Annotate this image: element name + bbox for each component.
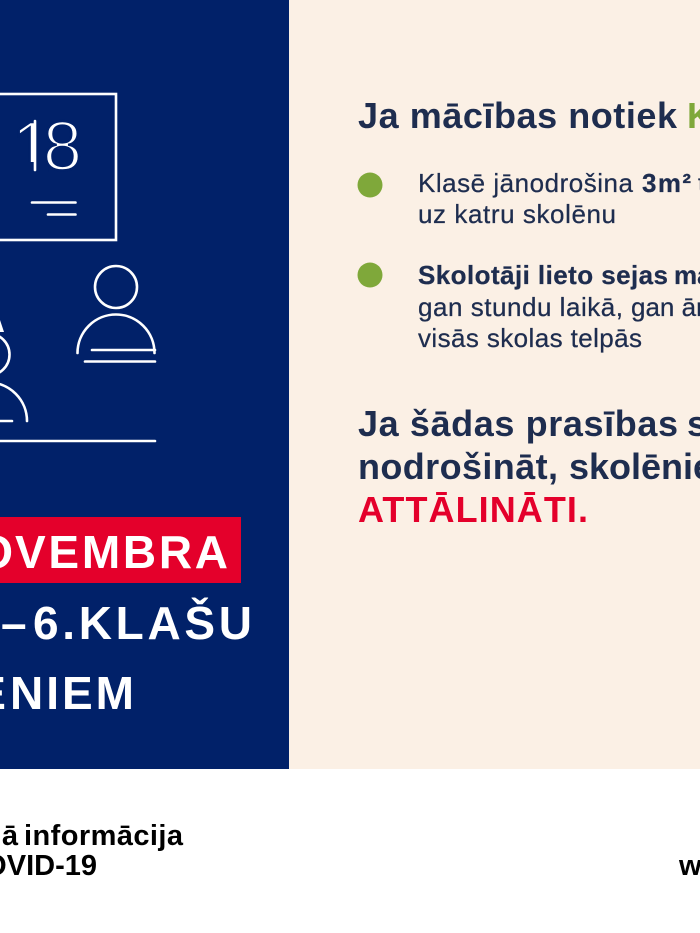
icon: board: 8 [43, 107, 82, 185]
icon: desk line [0, 440, 155, 442]
bullet: floor space: 3m² [642, 168, 691, 198]
bullet: floor space [358, 168, 700, 229]
icon: right pupil [78, 266, 155, 362]
icon: board: 1 [12, 107, 51, 185]
bullet: face masks: visās skolas telpās [418, 323, 642, 353]
icon: left pupil [0, 320, 27, 421]
bullet: face masks: Skolotāji lieto sejas [418, 260, 668, 290]
callout: remote learning: ATTĀLINĀTI. [358, 489, 588, 530]
heading: in-person lessons: Ja mācības notiek [358, 95, 678, 136]
callout: remote learning: nodrošināt, [358, 446, 558, 487]
date banner [0, 517, 241, 583]
footer: information note: informācija [24, 820, 184, 852]
date banner: VEMBRA [15, 526, 228, 578]
footer: information note [0, 820, 184, 882]
icon: classroom with board and pupils [0, 94, 155, 441]
panel: right beige panel [289, 0, 700, 769]
panel: left navy panel [0, 0, 289, 769]
bullet: floor space: Klasē jānodrošina [418, 168, 634, 198]
heading: grades: – [1, 597, 27, 649]
bullet: floor space: uz katru skolēnu [418, 199, 616, 229]
heading: grades: 6.KLAŠU [33, 597, 252, 649]
icon: board [0, 94, 116, 240]
callout: remote learning [358, 403, 700, 530]
callout: remote learning: Ja šādas prasības [358, 403, 678, 444]
bullet: face masks [358, 260, 700, 353]
heading: pupils: NIEM [10, 667, 134, 719]
bullet: face masks: gan stundu laikā, [418, 292, 623, 322]
